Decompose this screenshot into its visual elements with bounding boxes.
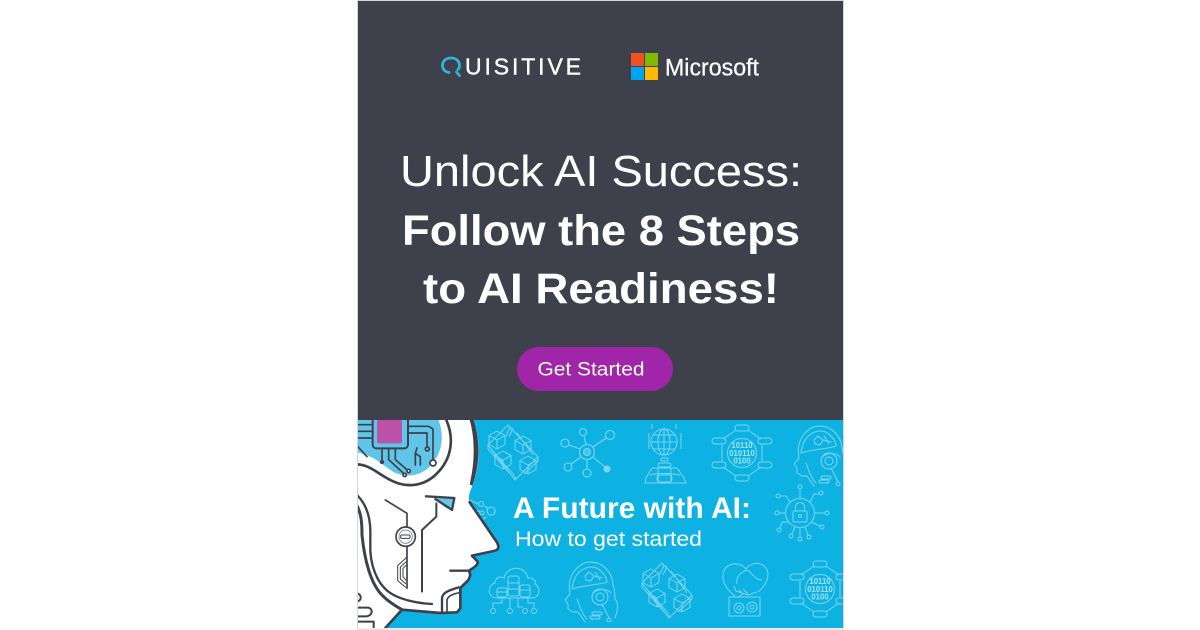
face seam lines — [357, 495, 469, 628]
icon: four squares — [631, 53, 658, 80]
icon: binary hub bottom — [790, 561, 850, 617]
icon: globe on pedestal — [645, 424, 686, 483]
forehead edge shading — [470, 420, 478, 486]
eye — [426, 496, 454, 510]
panel: blue banner — [357, 420, 850, 628]
icon: network — [561, 428, 614, 477]
circuit traces — [357, 425, 436, 477]
wordmark: UISITIVE — [465, 54, 581, 80]
binary digits bottom: 10110 — [809, 577, 831, 586]
icon: handshake heart — [723, 563, 768, 616]
icon: small circuit behind face — [470, 500, 495, 521]
heading: Unlock AI Success: — [400, 147, 802, 196]
chip — [373, 420, 408, 448]
heading: Follow the 8 Steps — [402, 207, 800, 255]
illustration: robot head — [357, 420, 498, 628]
face outline — [385, 502, 498, 628]
frame border — [358, 0, 844, 629]
banner subheading: How to get started — [515, 528, 702, 551]
ear dial — [396, 527, 415, 546]
panel: dark header — [358, 0, 843, 420]
binary digits — [730, 442, 754, 464]
binary digits bottom: 010110 — [807, 585, 833, 594]
heading: to AI Readiness! — [423, 265, 779, 313]
heading — [400, 147, 802, 313]
button: Get Started: Get Started — [538, 360, 644, 380]
icon: cloud database — [489, 568, 539, 614]
banner heading: A Future with AI: — [513, 492, 751, 525]
wordmark: Microsoft — [665, 54, 759, 82]
icon: AI head top right — [794, 426, 847, 486]
binary digits bottom — [808, 578, 832, 600]
binary digits: 0100 — [733, 456, 751, 466]
binary digits bottom: 0100 — [811, 592, 829, 602]
logo: Microsoft — [631, 53, 759, 82]
binary digits: 010110 — [729, 449, 755, 458]
icon: magnifier Q — [442, 58, 460, 76]
icon: padlock circuit — [775, 485, 829, 541]
skull outline — [357, 420, 451, 485]
brain cavity — [357, 420, 442, 476]
icon: cubes bottom — [642, 563, 692, 618]
logo: Quisitive — [442, 54, 581, 80]
infographic canvas — [357, 0, 844, 630]
icon: cubes top — [488, 425, 538, 480]
icon: binary hub top — [712, 425, 772, 481]
button: Get Started — [517, 347, 673, 391]
icon: AI head bottom — [565, 562, 618, 622]
head silhouette — [357, 420, 498, 628]
binary digits: 10110 — [731, 441, 753, 450]
